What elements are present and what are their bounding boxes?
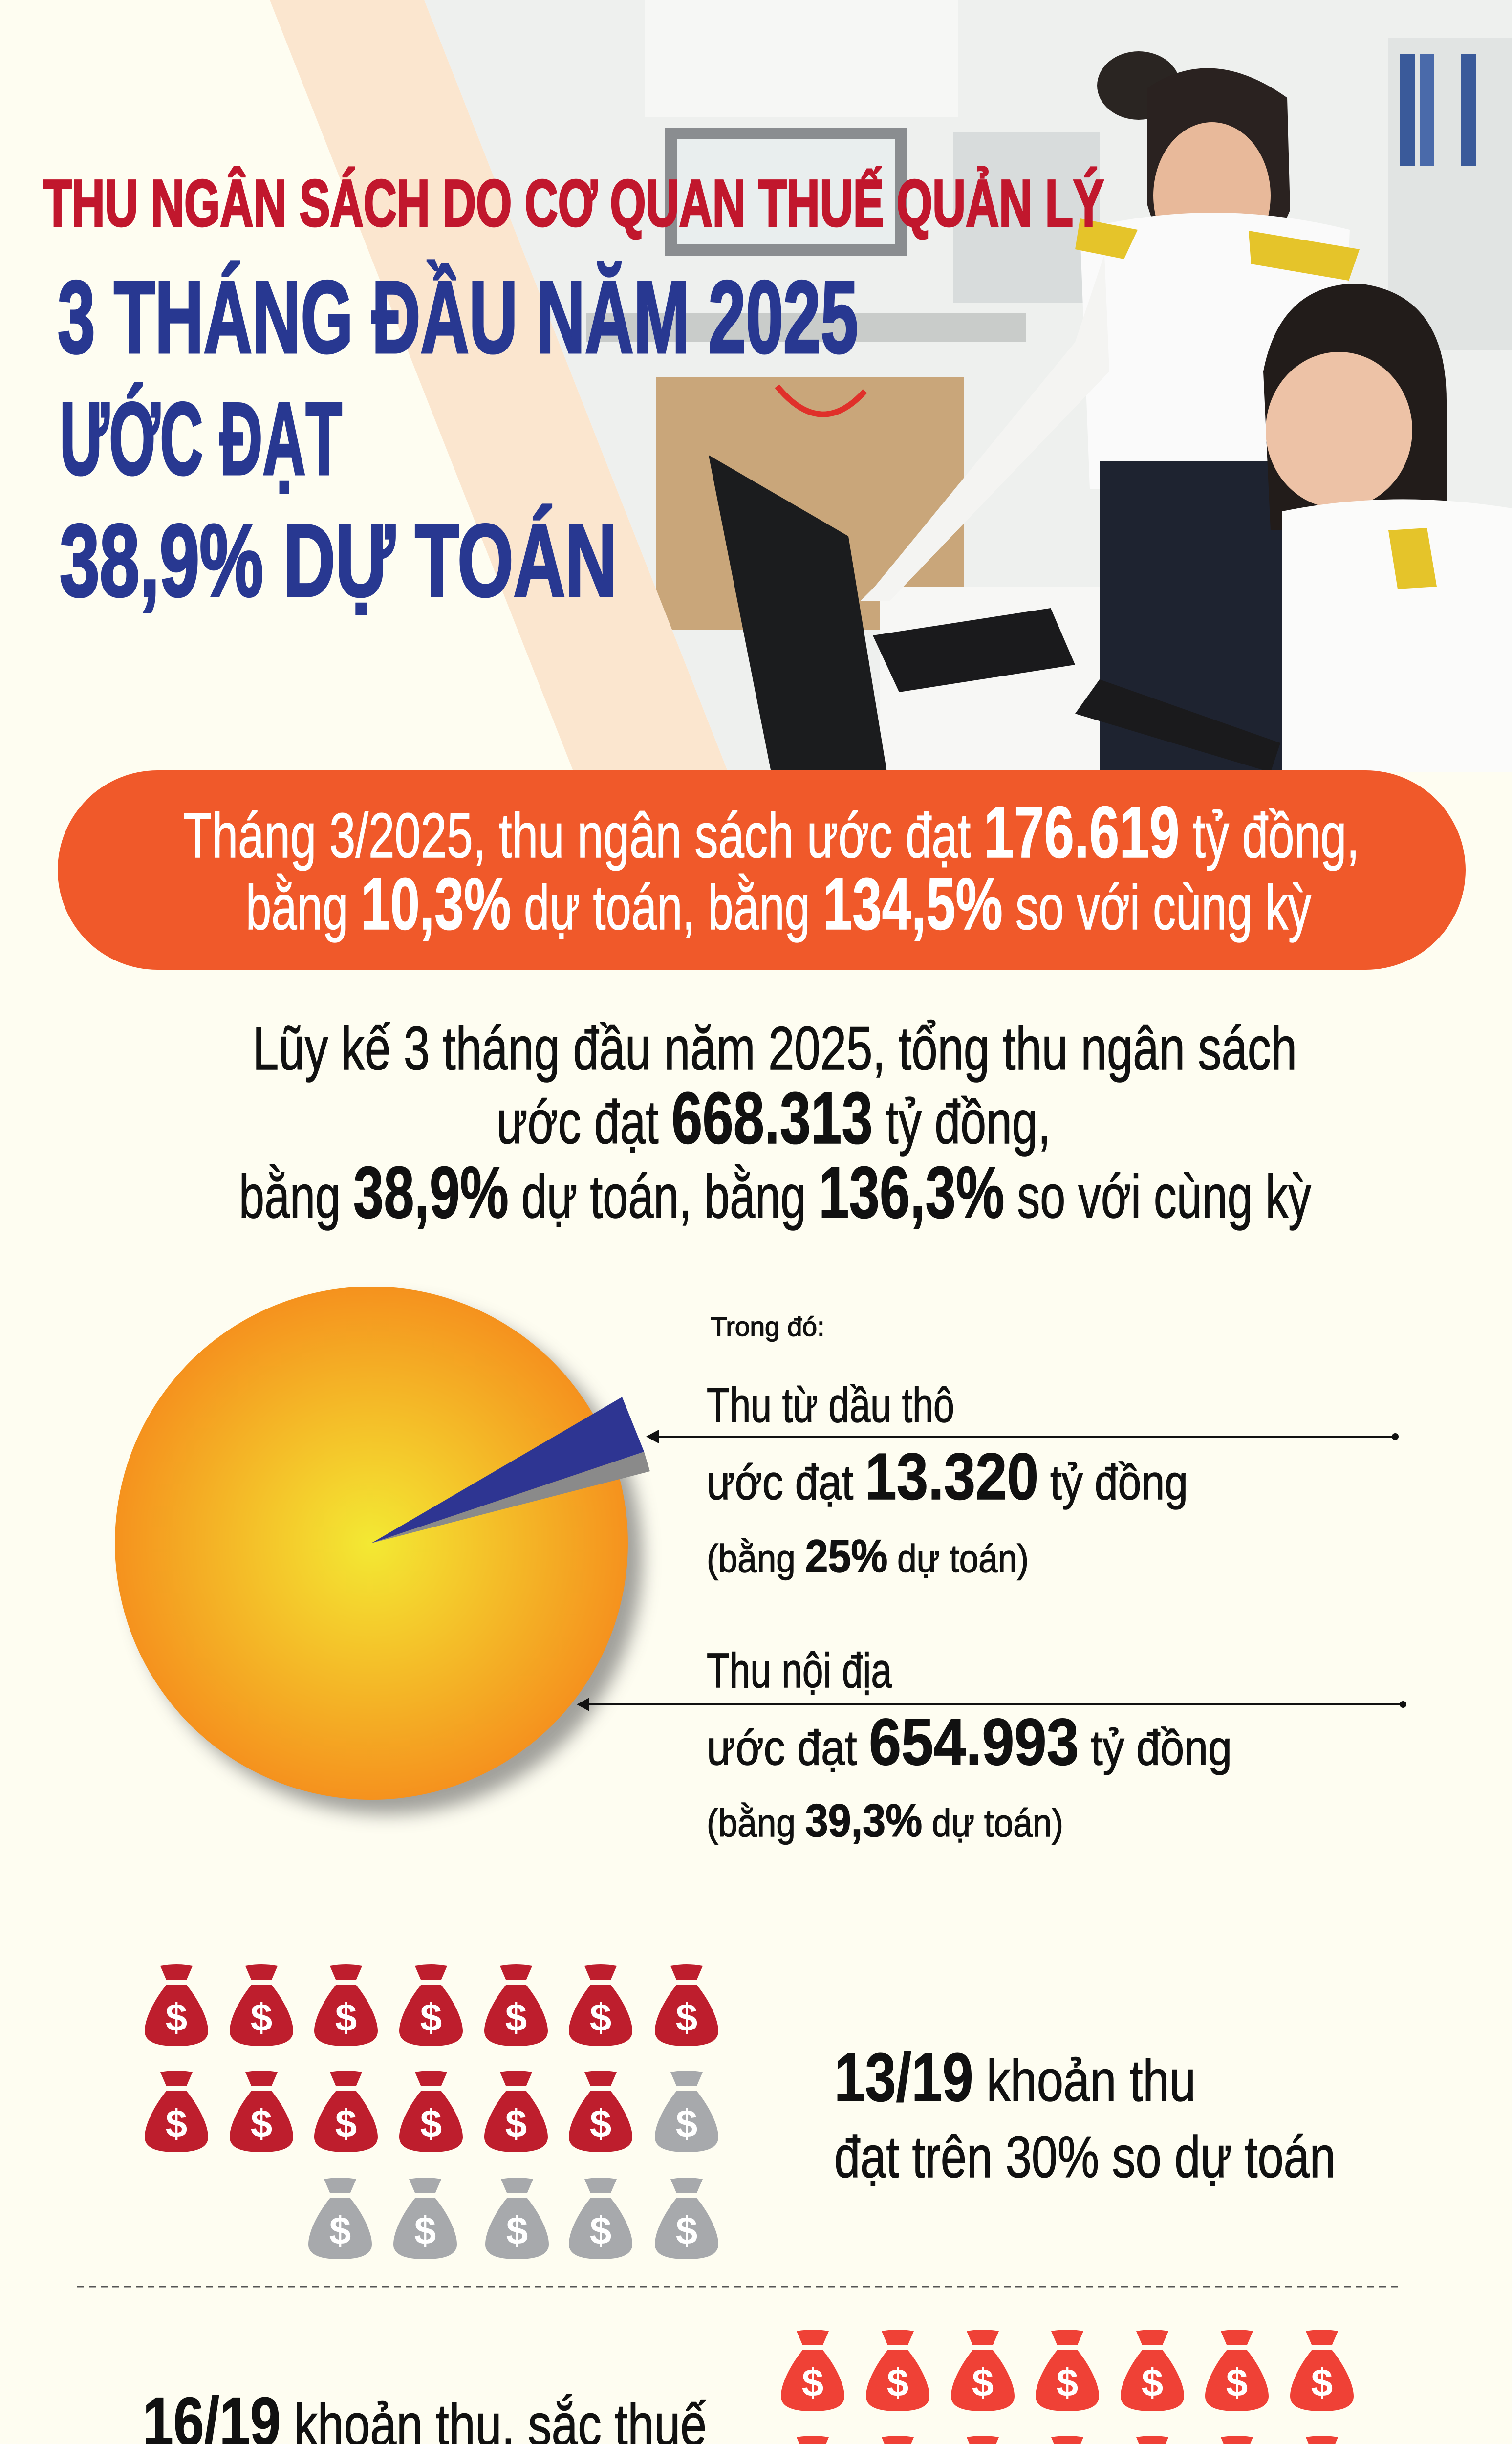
icon group: money bags 16/19: $ [972, 2361, 994, 2404]
icon group: money bags 13/19: $ [676, 2209, 697, 2252]
cumulative summary text: ước đạt 668.313 tỷ đồng, [497, 1077, 1051, 1159]
icon group: money bags 13/19: $ [329, 2209, 351, 2252]
icon group: money bags 13/19: $ [420, 2102, 442, 2145]
orange highlight pill [58, 770, 1466, 970]
orange highlight pill: bằng 10,3% dự toán, bằng 134,5% so với cùng kỳ [246, 863, 1311, 945]
icon group: money bags 13/19: $ [506, 2209, 528, 2252]
icon group: money bags 16/19: $ [1311, 2361, 1333, 2404]
photo: tax officers at computer [391, 0, 1512, 782]
title line 4: 38,9% DỰ TOÁN [60, 503, 617, 618]
icon group: money bags 13/19: $ [590, 2102, 611, 2145]
icon group: money bags 16/19: $ [1226, 2361, 1248, 2404]
icon group: money bags 16/19: $ [802, 2361, 823, 2404]
icon group: money bags 16/19: $ [887, 2361, 908, 2404]
orange highlight pill: Tháng 3/2025, thu ngân sách ước đạt 176.619 tỷ đồng, [183, 791, 1360, 873]
callout: crude oil revenue: (bằng 25% dự toán) [707, 1530, 1029, 1582]
cumulative summary text [239, 1015, 1311, 1233]
icon group: money bags 16/19: $ [1057, 2361, 1078, 2404]
icon group: money bags 13/19: $ [335, 2102, 357, 2145]
icon group: money bags 13/19: $ [420, 1996, 442, 2039]
icon group: money bags 16/19: $ [1142, 2361, 1163, 2404]
label: Trong đó: Trong đó: [711, 1311, 824, 1342]
icon group: money bags 13/19: $ [166, 2102, 187, 2145]
icon group: money bags 13/19: $ [251, 1996, 272, 2039]
icon group: money bags 13/19: $ [590, 2209, 611, 2252]
icon group: money bags 13/19: $ [590, 1996, 611, 2039]
icon group: money bags 16/19 [781, 2330, 1354, 2444]
icon group: money bags 13/19: $ [505, 2102, 527, 2145]
callout: domestic revenue [707, 1643, 1232, 1847]
stat text: 13/19 [834, 2039, 1336, 2190]
stat text: 13/19: 13/19 khoản thu [834, 2039, 1196, 2116]
callout: crude oil revenue: Thu từ dầu thô [707, 1378, 954, 1433]
pie chart [115, 1287, 650, 1814]
callout: crude oil revenue: ước đạt 13.320 tỷ đồng [707, 1440, 1188, 1513]
cumulative summary text: bằng 38,9% dự toán, bằng 136,3% so với cùng kỳ [239, 1151, 1311, 1233]
callout: domestic revenue: (bằng 39,3% dự toán) [707, 1795, 1063, 1847]
icon group: money bags 13/19: $ [505, 1996, 527, 2039]
decorative peach band [270, 0, 728, 772]
stat text: 13/19: đạt trên 30% so dự toán [834, 2124, 1336, 2190]
icon group: money bags 13/19: $ [414, 2209, 436, 2252]
arrow: crude oil [646, 1430, 1399, 1443]
title line 2: 3 THÁNG ĐẦU NĂM 2025 [58, 260, 858, 374]
icon group: money bags 13/19: $ [676, 1996, 697, 2039]
icon group: money bags 13/19 [145, 1964, 718, 2259]
icon group: money bags 13/19: $ [251, 2102, 272, 2145]
arrow: domestic [577, 1698, 1406, 1711]
callout: domestic revenue: ước đạt 654.993 tỷ đồng [707, 1705, 1232, 1779]
callout: crude oil revenue [707, 1378, 1188, 1582]
callout: domestic revenue: Thu nội địa [707, 1643, 892, 1698]
icon group: money bags 13/19: $ [335, 1996, 357, 2039]
icon group: money bags 13/19: $ [166, 1996, 187, 2039]
title line 3: ƯỚC ĐẠT [60, 381, 342, 496]
icon group: money bags 13/19: $ [676, 2102, 697, 2145]
